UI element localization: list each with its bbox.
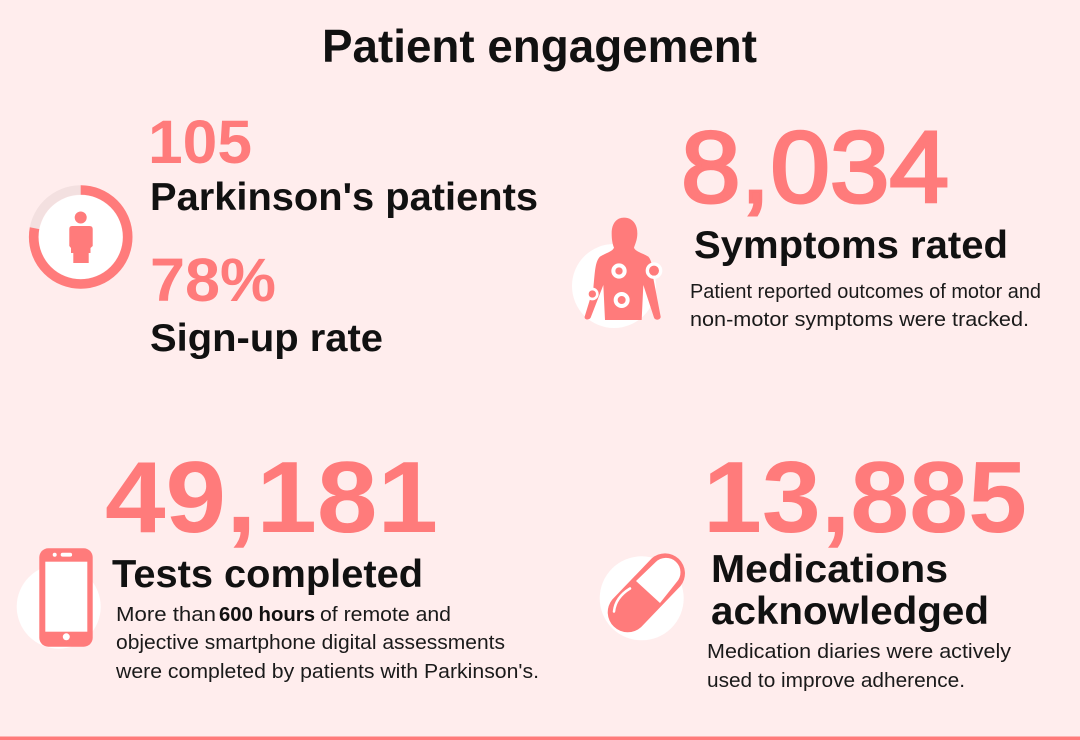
stat: 105: 105 [148, 108, 252, 176]
label: Tests completed: Tests completed [112, 553, 423, 596]
text: tests description: 600 hours [219, 604, 315, 626]
panel: patients and sign-up [34, 108, 538, 360]
text: medications description: Medication diaries were actively [707, 641, 1011, 663]
panel: symptoms rated [572, 112, 1041, 331]
bottom rule [0, 736, 1080, 740]
panel: medications acknowledged [600, 442, 1027, 692]
text: tests description: were completed by patients with Parkinson's. [115, 661, 539, 683]
text: symptoms description: non-motor symptoms were tracked. [690, 309, 1029, 331]
label: Medications acknowledged: acknowledged [711, 590, 989, 633]
icon: sign-up rate ring with person [34, 190, 128, 284]
label: Parkinson's patients: Parkinson's patients [150, 176, 538, 219]
text: symptoms description [690, 281, 1041, 331]
stat: 49,181: 49,181 [105, 442, 438, 554]
panel: tests completed [17, 442, 539, 683]
icon: smartphone [17, 548, 101, 649]
text: tests description [115, 604, 539, 683]
stat: 78%: 78% [150, 246, 276, 314]
text: tests description: of remote and [320, 604, 451, 626]
stat: 8,034: 8,034 [681, 112, 949, 224]
label: Medications acknowledged [711, 548, 989, 633]
label: Symptoms rated: Symptoms rated [694, 224, 1008, 267]
text: tests description: objective smartphone digital assessments [116, 632, 505, 654]
icon: body with symptom points [572, 218, 661, 328]
label: Sign-up rate: Sign-up rate [150, 317, 383, 360]
icon: pill capsule [600, 553, 685, 640]
title: Patient engagement [322, 20, 757, 72]
stat: 13,885: 13,885 [703, 442, 1027, 554]
text: symptoms description: Patient reported outcomes of motor and [690, 281, 1041, 303]
text: tests description: More than [116, 604, 216, 626]
text: medications description: used to improve adherence. [707, 670, 965, 692]
label: Medications acknowledged: Medications [711, 548, 948, 591]
text: medications description [707, 641, 1011, 692]
